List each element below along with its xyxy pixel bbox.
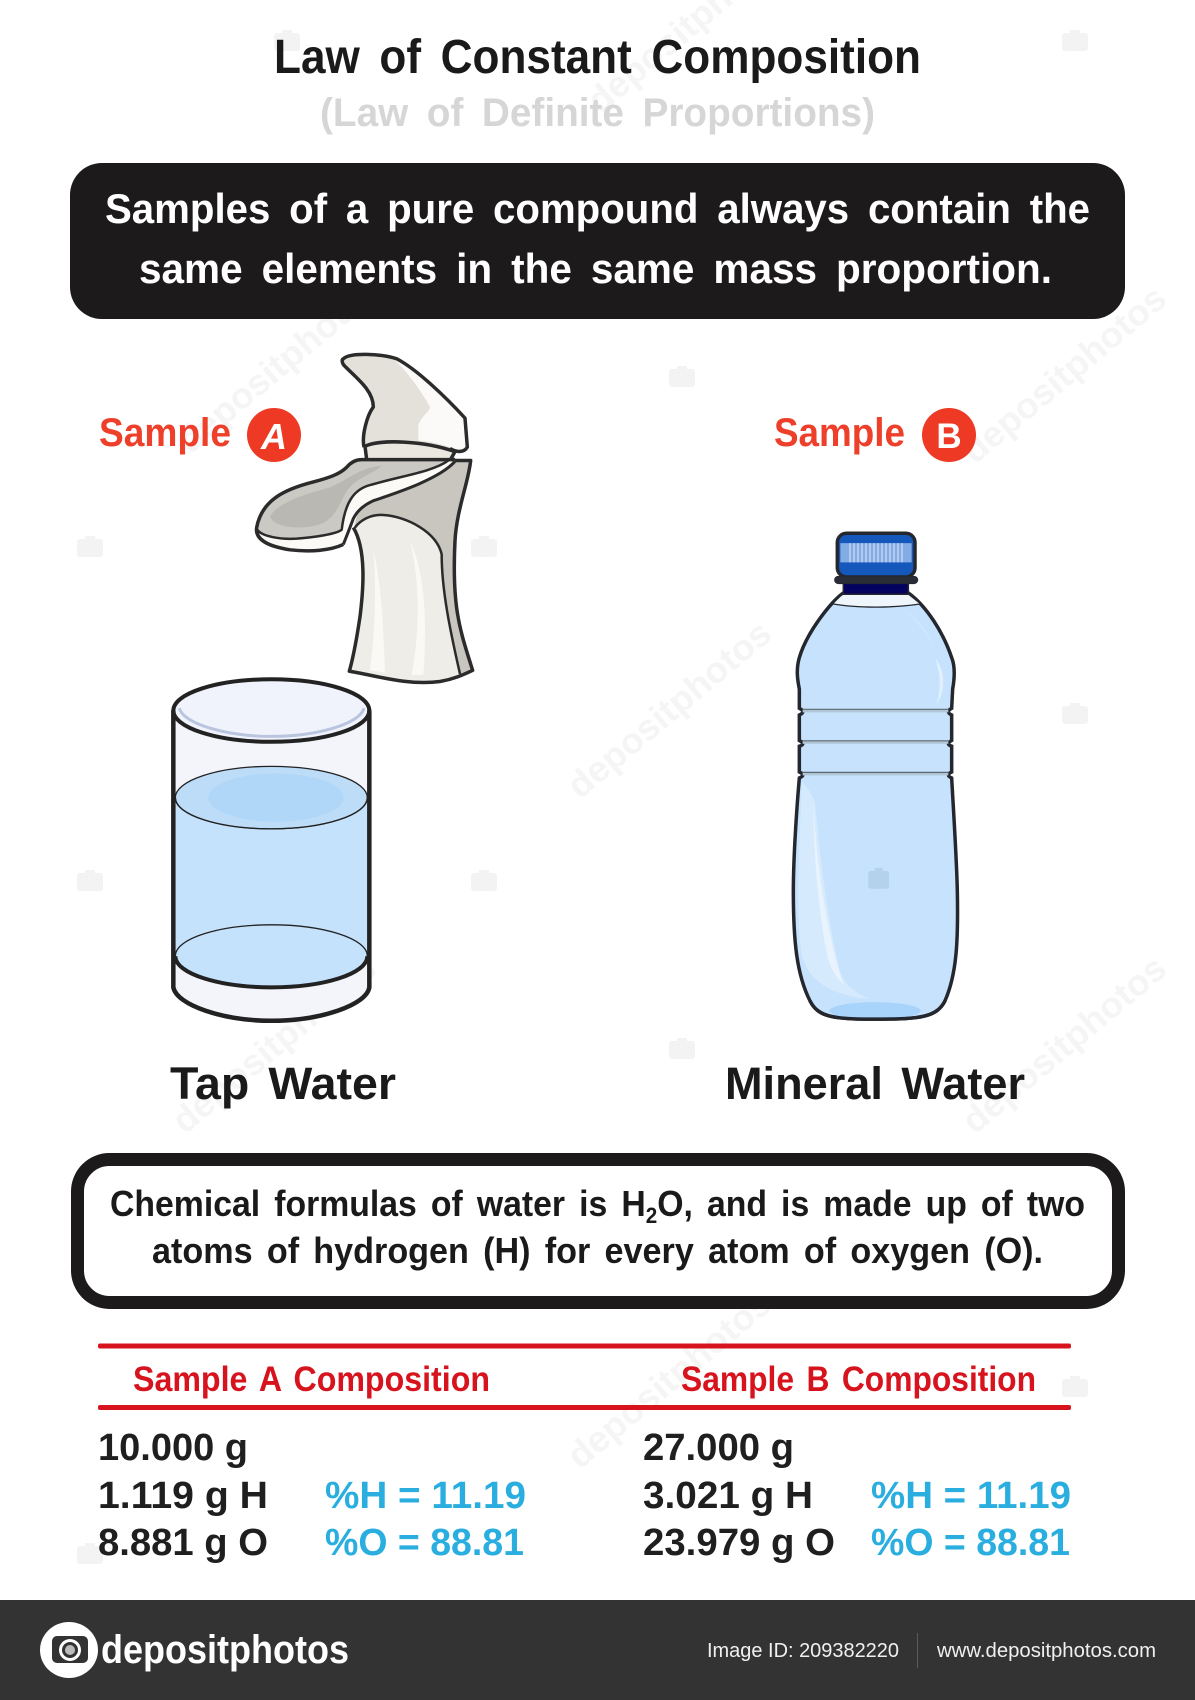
panel: water formula note: atoms of hydrogen (H) for every atom of oxygen (O).	[152, 1230, 1043, 1271]
text: depositphotos	[954, 277, 1174, 471]
sample B masses: 3.021 g H	[643, 1475, 813, 1517]
sample B masses	[643, 1427, 835, 1564]
sample A masses: 8.881 g O	[98, 1522, 268, 1564]
sample B masses: 23.979 g O	[643, 1522, 835, 1564]
text: depositphotos	[954, 947, 1174, 1141]
sample B masses: 27.000 g	[643, 1427, 794, 1469]
icon: footer logo	[40, 1622, 98, 1678]
icon: faucet	[257, 354, 473, 683]
text: depositphotos	[169, 267, 389, 461]
label: sample A	[99, 408, 301, 462]
panel: definition banner	[70, 163, 1125, 319]
label: sample B	[774, 408, 976, 462]
sample B percentages	[871, 1475, 1071, 1564]
text: depositphotos	[559, 1282, 779, 1476]
composition table header: Sample A Composition	[133, 1360, 490, 1399]
footer bar: depositphotos	[101, 1628, 349, 1672]
text: depositphotos	[559, 612, 779, 806]
sample A percentages: %H = 11.19	[325, 1475, 526, 1517]
label: sample B: Sample	[774, 411, 905, 455]
footer bar	[0, 1600, 1195, 1700]
footer bar: www.depositphotos.com	[936, 1640, 1156, 1662]
label: mineral water: Mineral Water	[725, 1058, 1025, 1109]
label: tap water: Tap Water	[170, 1058, 396, 1109]
sample A masses: 10.000 g	[98, 1427, 248, 1469]
sample B percentages: %H = 11.19	[871, 1475, 1071, 1517]
icon: glass of water	[173, 679, 369, 1021]
sample A masses	[98, 1427, 268, 1564]
subtitle: (Law of Definite Proportions)	[320, 91, 875, 135]
panel: water formula note	[78, 1160, 1118, 1302]
label: sample A: Sample	[99, 411, 231, 455]
icon: water bottle	[793, 533, 958, 1019]
footer bar: Image ID: 209382220	[707, 1640, 899, 1662]
sample A percentages: %O = 88.81	[325, 1522, 524, 1564]
title: Law of Constant Composition	[274, 31, 921, 84]
label: sample B: B	[936, 417, 962, 456]
text: depositphotos	[164, 947, 384, 1141]
composition table header	[98, 1344, 1071, 1410]
composition table header: Sample B Composition	[681, 1360, 1036, 1399]
panel: water formula note: Chemical formulas of water is H	[110, 1183, 681, 1224]
panel: water formula note: O, and is made up of two	[657, 1183, 1085, 1224]
panel: water formula note: 2	[646, 1203, 657, 1228]
sample A percentages	[325, 1475, 526, 1564]
sample B percentages: %O = 88.81	[871, 1522, 1070, 1564]
panel: definition banner: Samples of a pure compound always contain the	[105, 185, 1090, 232]
panel: definition banner: same elements in the same mass proportion.	[139, 245, 1052, 292]
label: sample A: A	[260, 416, 287, 457]
sample A masses: 1.119 g H	[98, 1475, 268, 1517]
